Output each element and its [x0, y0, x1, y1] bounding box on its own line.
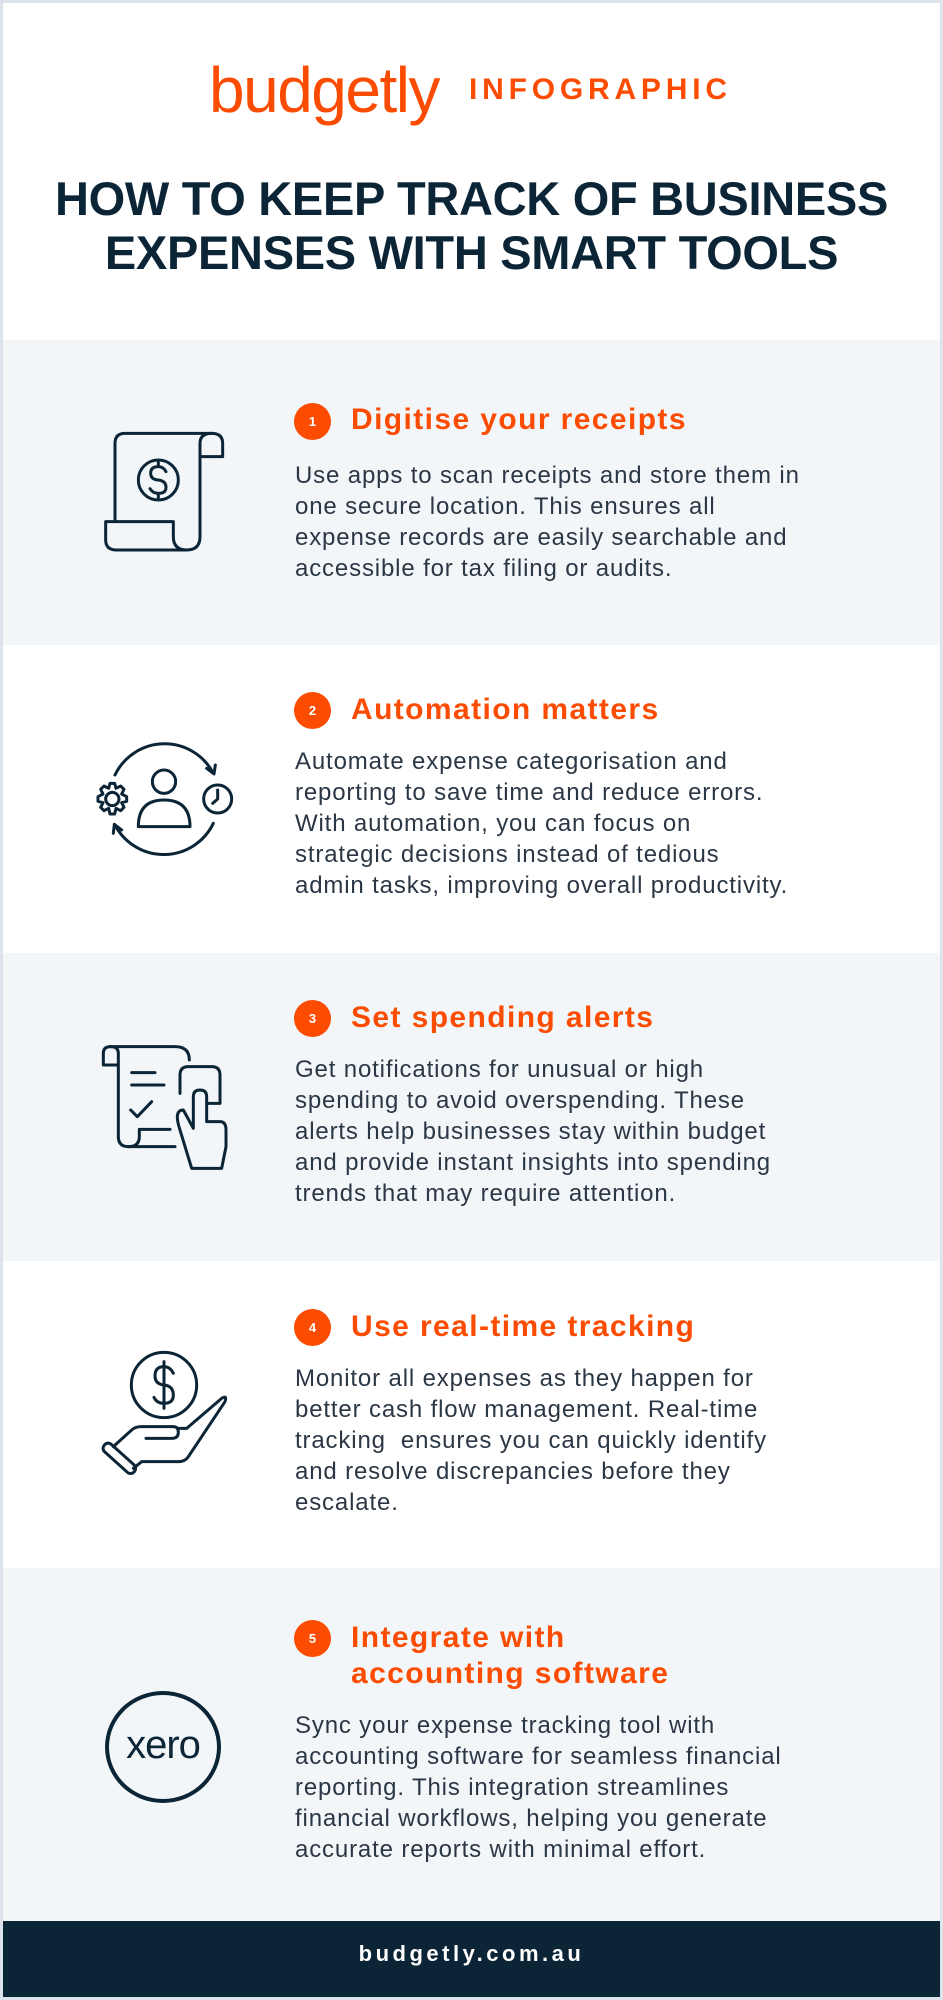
icon: spending alerts	[103, 1047, 226, 1168]
body 4: and resolve discrepancies before they	[295, 1458, 731, 1485]
body 5: reporting. This integration streamlines	[295, 1774, 729, 1801]
number badge 5: 5	[309, 1631, 316, 1646]
number badge 3	[294, 1000, 331, 1037]
body 4: better cash flow management. Real-time	[295, 1396, 758, 1423]
number badge 1: 1	[309, 414, 316, 429]
body 3: trends that may require attention.	[295, 1180, 676, 1207]
body 5: accurate reports with minimal effort.	[295, 1836, 706, 1863]
heading 5: Integrate with	[351, 1621, 566, 1654]
body 3: alerts help businesses stay within budget	[295, 1118, 766, 1145]
body 2: reporting to save time and reduce errors.	[295, 779, 763, 806]
body 1: Use apps to scan receipts and store them in	[295, 462, 800, 489]
body 5: financial workflows, helping you generate	[295, 1805, 767, 1832]
heading 5: accounting software	[351, 1657, 669, 1690]
logo: budgetly: budgetly	[209, 54, 439, 126]
label: infographic: INFOGRAPHIC	[469, 73, 732, 106]
body 4: escalate.	[295, 1489, 399, 1516]
icon: receipt scroll	[106, 433, 223, 550]
body 4: tracking ensures you can quickly identify	[295, 1427, 767, 1454]
number badge 2: 2	[309, 703, 316, 718]
body 2: With automation, you can focus on	[295, 810, 691, 837]
body 3: Get notifications for unusual or high	[295, 1056, 704, 1083]
body 3	[295, 1056, 771, 1207]
heading 1: Digitise your receipts	[351, 403, 687, 436]
body 3: and provide instant insights into spending	[295, 1149, 771, 1176]
heading 3: Set spending alerts	[351, 1001, 654, 1034]
item 2	[294, 692, 788, 899]
icon: automation cycle	[98, 744, 232, 855]
panel: section 1	[0, 340, 943, 645]
footer: budgetly.com.au	[359, 1941, 584, 1966]
panel: section 4	[0, 1261, 943, 1568]
icon: xero logo	[105, 1691, 221, 1803]
body 2: admin tasks, improving overall productivity.	[295, 872, 788, 899]
heading 2: Automation matters	[351, 693, 660, 726]
panel: section 5	[0, 1568, 943, 1921]
body 2	[295, 748, 788, 899]
number badge 1	[294, 403, 331, 440]
heading 5	[351, 1621, 669, 1690]
body 1: accessible for tax filing or audits.	[295, 555, 672, 582]
body 1: expense records are easily searchable and	[295, 524, 787, 551]
body 4	[295, 1365, 767, 1516]
icon: xero logo: xero	[126, 1723, 200, 1767]
number badge 2	[294, 692, 331, 729]
icons 1 and 2	[96, 432, 234, 856]
icon: hand with coin	[101, 1352, 226, 1475]
header logo	[209, 54, 732, 126]
body 4: Monitor all expenses as they happen for	[295, 1365, 754, 1392]
item 4	[294, 1309, 767, 1516]
panel: section 3	[0, 953, 943, 1261]
title	[55, 172, 888, 279]
body 2: Automate expense categorisation and	[295, 748, 728, 775]
icons 3 and 4	[102, 1045, 228, 1475]
number badge 5	[294, 1620, 331, 1657]
body 1: one secure location. This ensures all	[295, 493, 716, 520]
body 5: accounting software for seamless financial	[295, 1743, 782, 1770]
item 5	[294, 1620, 782, 1863]
body 3: spending to avoid overspending. These	[295, 1087, 745, 1114]
panel: section 2	[0, 645, 943, 953]
number badge 4: 4	[309, 1320, 316, 1335]
number badge 4	[294, 1309, 331, 1346]
body 1	[295, 462, 800, 582]
body 5: Sync your expense tracking tool with	[295, 1712, 715, 1739]
title: EXPENSES WITH SMART TOOLS	[105, 226, 838, 279]
footer	[0, 1921, 943, 2000]
title: HOW TO KEEP TRACK OF BUSINESS	[55, 172, 888, 225]
item 3	[294, 1000, 771, 1207]
number badge 3: 3	[309, 1011, 316, 1026]
item 1	[294, 403, 800, 582]
body 2: strategic decisions instead of tedious	[295, 841, 720, 868]
heading 4: Use real-time tracking	[351, 1310, 695, 1343]
body 5	[295, 1712, 782, 1863]
